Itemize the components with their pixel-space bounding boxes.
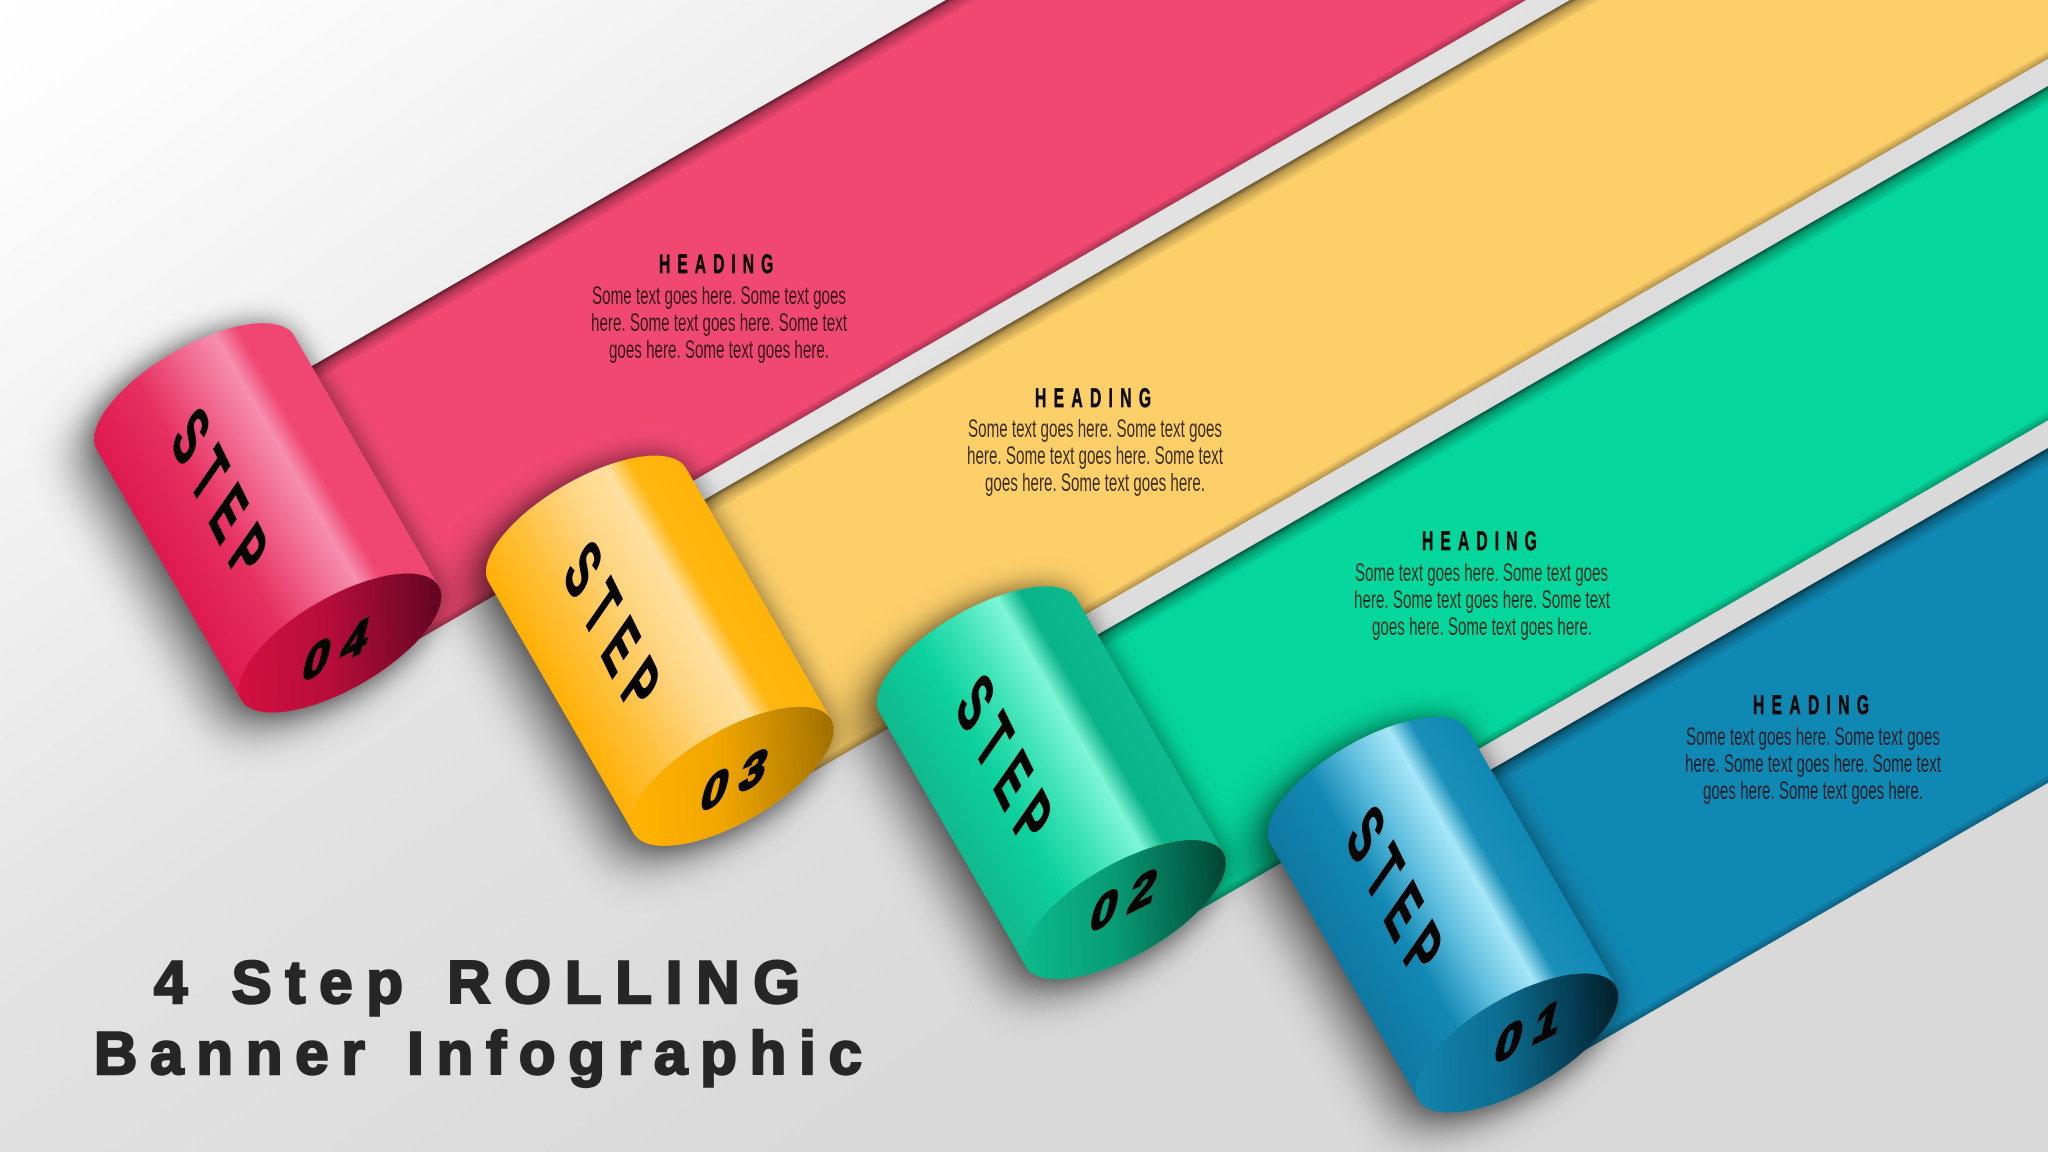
banner 02 xyxy=(999,0,2048,943)
text block 03 xyxy=(967,383,1223,497)
text block 04 xyxy=(591,249,847,364)
title: Banner Infographic xyxy=(94,1020,862,1087)
text block 03: Some text goes here. Some text goes xyxy=(968,415,1222,443)
step 04 panel xyxy=(46,0,2048,761)
roller 03 xyxy=(438,428,857,894)
text block 04: Some text goes here. Some text goes xyxy=(592,282,846,310)
roller 02 xyxy=(829,559,1249,1028)
text block 02: HEADING xyxy=(1422,526,1537,556)
text block 03: HEADING xyxy=(1035,383,1151,413)
text block 04: HEADING xyxy=(659,249,773,279)
text block 02: goes here. Some text goes here. xyxy=(1372,613,1592,641)
text block 03: goes here. Some text goes here. xyxy=(985,469,1205,497)
text block 01 xyxy=(1685,690,1941,805)
roller 01: STEP xyxy=(1336,787,1453,998)
roller 01 xyxy=(1220,690,1642,1152)
banner 04 xyxy=(213,0,2048,674)
roller 02: STEP xyxy=(946,655,1063,866)
step 03 panel xyxy=(438,0,2048,894)
banner 01 xyxy=(1392,0,2048,1078)
banner 03 xyxy=(606,0,2048,808)
roller 01: 01 xyxy=(1489,987,1567,1076)
text block 02 xyxy=(1354,526,1610,641)
text block 04: here. Some text goes here. Some text xyxy=(591,309,847,337)
roller 03: 03 xyxy=(696,735,773,824)
roller 03: STEP xyxy=(553,522,670,733)
roller 04: 04 xyxy=(297,605,375,694)
roller 02: 02 xyxy=(1085,855,1163,944)
text block 02: here. Some text goes here. Some text xyxy=(1354,586,1610,614)
roller 04 xyxy=(46,296,465,761)
text block 03: here. Some text goes here. Some text xyxy=(967,442,1223,470)
text block 01: HEADING xyxy=(1753,690,1869,720)
text block 02: Some text goes here. Some text goes xyxy=(1355,559,1608,587)
roller 04: STEP xyxy=(161,389,278,600)
step 02 panel xyxy=(829,0,2048,1028)
text block 04: goes here. Some text goes here. xyxy=(609,336,829,364)
title xyxy=(94,949,862,1087)
title: 4 Step ROLLING xyxy=(154,949,800,1016)
step 01 panel xyxy=(1220,0,2048,1152)
